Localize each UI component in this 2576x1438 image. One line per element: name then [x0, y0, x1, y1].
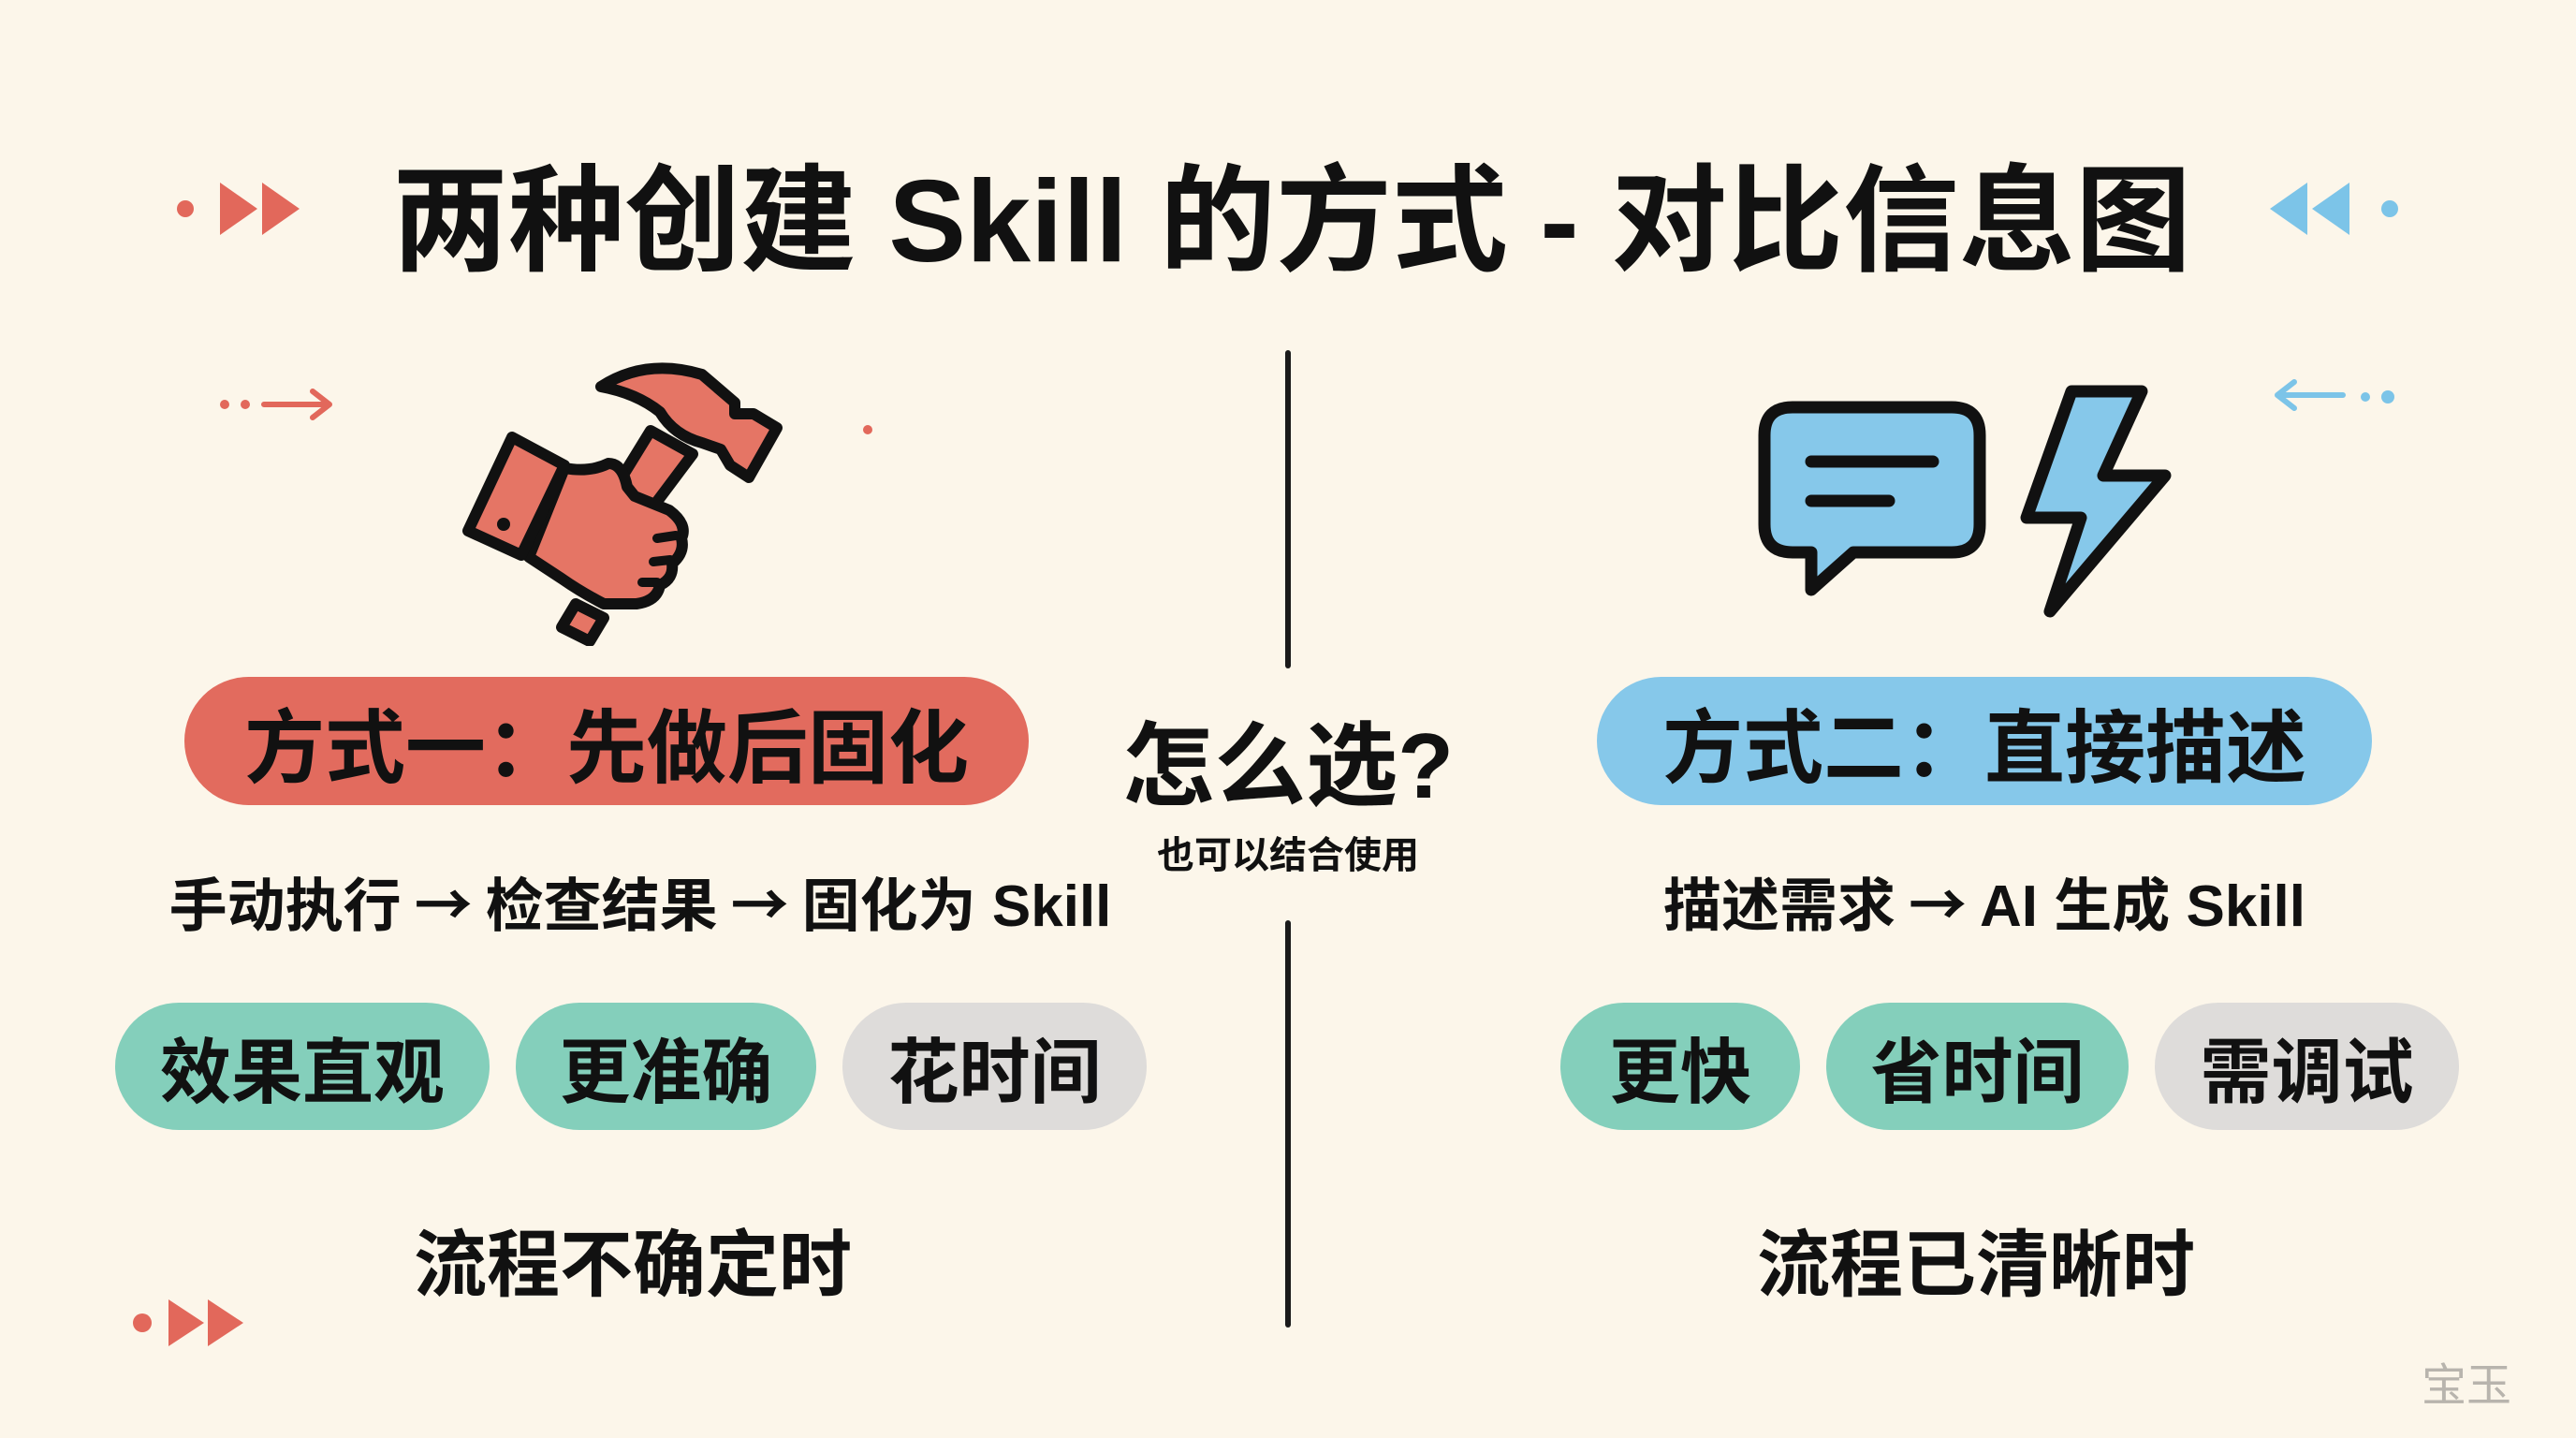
flow text left: → — [415, 858, 473, 943]
tag: 更快 — [1560, 1003, 1800, 1130]
pill: method one — [184, 677, 1029, 805]
tag: 需调试: 需调试 — [2200, 1034, 2413, 1113]
icon: hand with hammer — [462, 362, 783, 646]
tag: 省时间 — [1826, 1003, 2129, 1130]
flow text right: 描述需求 AI 生成 Skill — [1663, 874, 2305, 939]
watermark: 宝玉 — [2422, 1361, 2511, 1411]
flow text left: 手动执行 检查结果 固化为 Skill — [169, 874, 1111, 939]
pill: method one: 方式一：先做后固化 — [244, 704, 969, 794]
tag: 效果直观: 效果直观 — [160, 1034, 445, 1113]
tags right — [1560, 1003, 2459, 1130]
icon: left title arrows — [177, 183, 300, 235]
flow text right: → — [1909, 858, 1967, 943]
tag: 更准确: 更准确 — [560, 1034, 773, 1113]
tag: 效果直观 — [115, 1003, 490, 1130]
pill: method two — [1597, 677, 2372, 805]
tag: 省时间: 省时间 — [1870, 1034, 2084, 1113]
icon: bottom left arrows — [133, 1299, 243, 1346]
bottom text left: 流程不确定时 — [414, 1224, 852, 1306]
flow text left: → — [731, 858, 789, 943]
bottom text right: 流程已清晰时 — [1757, 1224, 2195, 1306]
tag: 更快: 更快 — [1609, 1034, 1751, 1113]
tag: 花时间: 花时间 — [887, 1034, 1101, 1113]
tags left — [115, 1003, 1147, 1130]
pill: method two: 方式二：直接描述 — [1662, 704, 2306, 794]
decorative dot — [863, 425, 872, 434]
tag: 更准确 — [516, 1003, 816, 1130]
title: 两种创建 Skill 的方式 - 对比信息图 — [392, 157, 2191, 286]
center question: 怎么选? — [1122, 714, 1454, 817]
divider top — [1285, 350, 1291, 668]
tag: 花时间 — [842, 1003, 1147, 1130]
icon: chat bubble and lightning — [1758, 386, 2172, 618]
center subtext: 也可以结合使用 — [1157, 835, 1419, 876]
icon: small left arrow — [220, 389, 332, 420]
icon: small right arrow — [2275, 379, 2394, 411]
tag: 需调试 — [2155, 1003, 2459, 1130]
divider bottom — [1285, 920, 1291, 1328]
icon: right title arrows — [2270, 183, 2398, 235]
